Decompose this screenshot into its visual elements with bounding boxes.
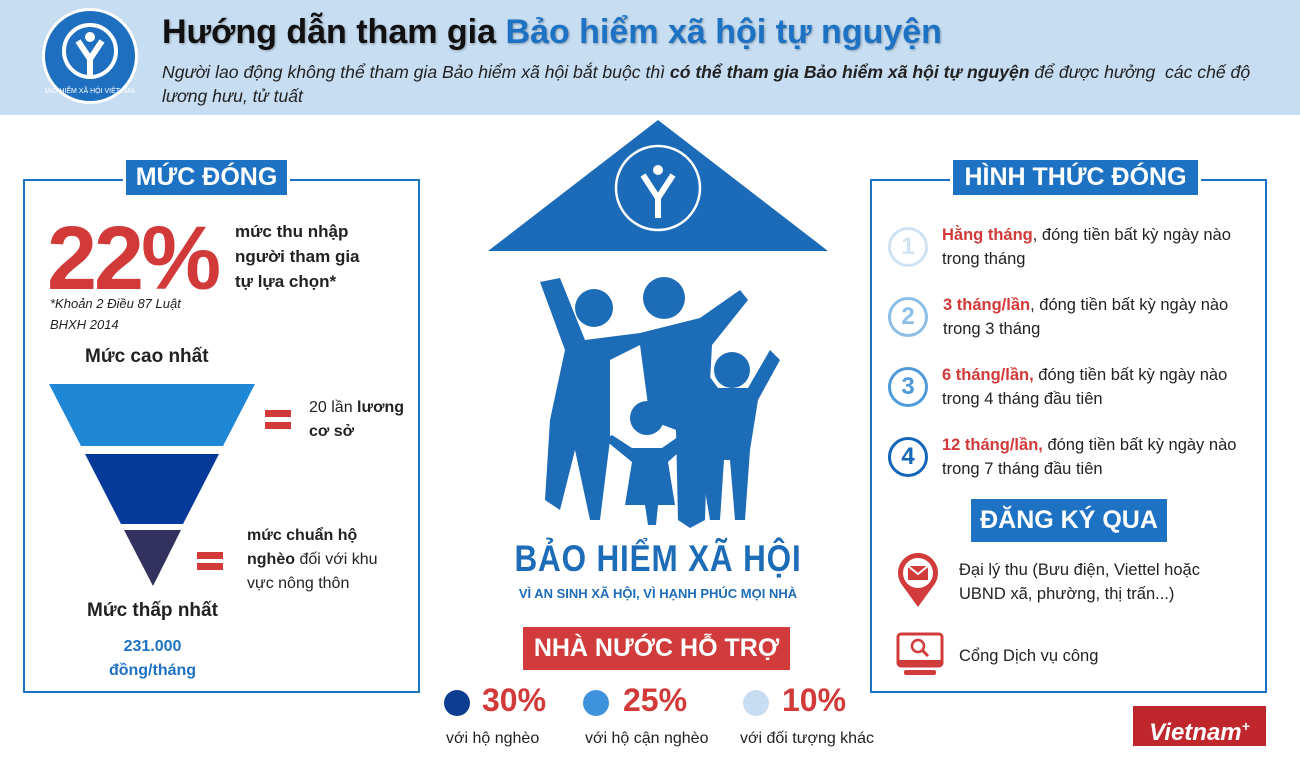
max value text [309,399,404,440]
heading: HÌNH THỨC ĐÓNG [950,157,1201,198]
min amount: đồng/tháng [109,662,196,679]
funnel chart [49,384,291,586]
heading: HÌNH THỨC ĐÓNG: HÌNH THỨC ĐÓNG [964,163,1187,191]
header band [0,0,1300,115]
heading: MỨC ĐÓNG [123,157,290,198]
item 3: trong 4 tháng đầu tiên [942,390,1103,408]
item 1: Hằng tháng, đóng tiền bất kỳ ngày nào [942,226,1231,244]
heading: ĐĂNG KÝ QUA: ĐĂNG KÝ QUA [980,506,1158,534]
subtitle: Người lao động không thể tham gia Bảo hiểm xã hội bắt buộc thì có thể tham gia Bảo hiểm xã hội tự nguyện để được hưởng các chế độ lương hưu, tử tuất [162,62,1250,106]
logo: Vietnam+ [1133,706,1266,746]
icon: BHXH logo [42,8,138,104]
title: Hướng dẫn tham gia Bảo hiểm xã hội tự nguyện [162,13,942,51]
item 1 [888,225,1231,268]
item 3 [888,366,1227,408]
logo: Vietnam+: Vietnam+ [1149,718,1250,746]
income text: tự lựa chọn* [235,272,336,291]
min amount [109,638,196,679]
support 30%: với hộ nghèo [446,730,539,747]
support 25%: với hộ cận nghèo [585,730,708,747]
support 30%: 30% [482,682,546,718]
income text: người tham gia [235,247,360,266]
max label: Mức cao nhất [85,346,209,367]
icon: location mail [898,553,938,607]
support 10% [740,682,874,747]
support 10%: 10% [782,682,846,718]
footnote [50,296,182,332]
item 1: trong tháng [942,250,1025,268]
min value text: nghèo đối với khu [247,551,378,568]
heading: ĐĂNG KÝ QUA [971,499,1167,542]
item 4: 4 [901,443,915,470]
item 2: trong 3 tháng [943,320,1040,338]
min value text: mức chuẩn hộ [247,527,357,544]
footnote: BHXH 2014 [50,317,119,332]
heading: MỨC ĐÓNG: MỨC ĐÓNG [136,163,277,191]
footnote: *Khoản 2 Điều 87 Luật [50,296,181,311]
portal text: Cổng Dịch vụ công [959,647,1098,665]
item 2: 3 tháng/lần, đóng tiền bất kỳ ngày nào [943,296,1228,314]
support 30% [444,682,546,747]
item 2: 2 [901,303,915,330]
heading: NHÀ NƯỚC HỖ TRỢ: NHÀ NƯỚC HỖ TRỢ [534,634,779,662]
item 4 [888,436,1236,478]
big percent: 22% [47,209,218,309]
agent text: UBND xã, phường, thị trấn...) [959,585,1174,603]
icon: monitor [896,632,944,675]
income text: mức thu nhập [235,222,348,241]
support 25%: 25% [623,682,687,718]
panel: hình thức đóng [870,179,1267,693]
max value text: cơ sở [309,423,354,440]
roof [488,120,828,251]
item 4: 12 tháng/lần, đóng tiền bất kỳ ngày nào [942,436,1236,454]
min label: Mức thấp nhất [87,600,218,621]
agent text [959,561,1200,603]
min value text: vực nông thôn [247,575,349,592]
min value text [247,527,378,592]
logo text: BẢO HIỂM XÃ HỘI [514,538,802,579]
center illustration [488,120,828,601]
panel: mức đóng [23,179,420,693]
support 10%: với đối tượng khác [740,730,874,747]
item 3: 3 [901,373,915,400]
min amount: 231.000 [124,638,181,655]
income text [235,222,360,291]
item 3: 6 tháng/lần, đóng tiền bất kỳ ngày nào [942,366,1227,384]
item 2 [888,296,1228,338]
item 4: trong 7 tháng đầu tiên [942,460,1103,478]
max value text: 20 lần lương [309,399,404,416]
agent text: Đại lý thu (Bưu điện, Viettel hoặc [959,561,1200,579]
support 25% [583,682,708,747]
heading: NHÀ NƯỚC HỖ TRỢ [523,627,790,670]
item 1: 1 [901,233,915,260]
logo slogan: VÌ AN SINH XÃ HỘI, VÌ HẠNH PHÚC MỌI NHÀ [519,586,797,601]
